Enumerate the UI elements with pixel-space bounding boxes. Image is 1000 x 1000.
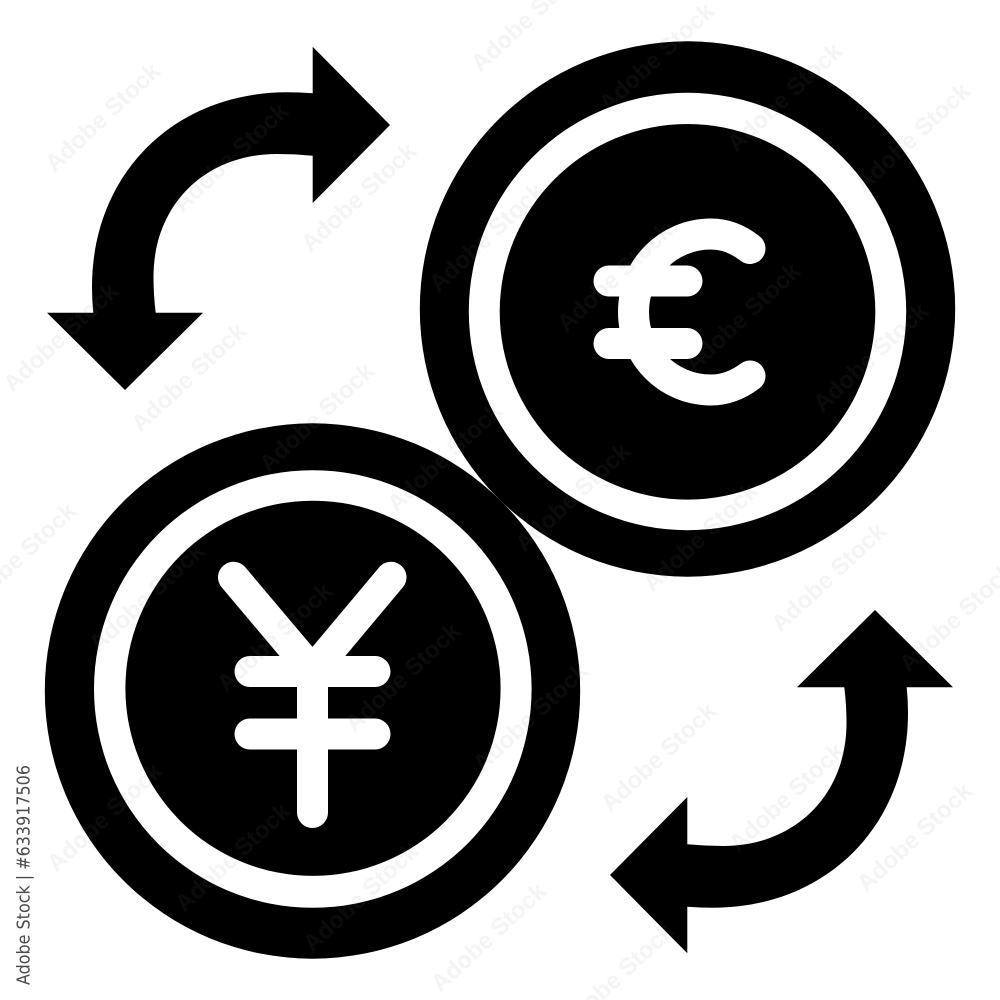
arrow: top-left curved double arrow [47,47,390,390]
faint diagonal watermark pattern: Adobe Stock [254,357,380,477]
faint diagonal watermark pattern: Adobe Stock [850,77,976,197]
faint diagonal watermark pattern: Adobe Stock [724,737,850,857]
faint diagonal watermark pattern: Adobe Stock [170,797,296,917]
faint diagonal watermark pattern: Adobe Stock [424,177,550,297]
faint diagonal watermark pattern: Adobe Stock [722,37,848,157]
faint diagonal watermark pattern: Adobe Stock [594,0,720,117]
euro symbol [609,234,750,390]
coin: yen [45,423,580,959]
faint diagonal watermark pattern: Adobe Stock [42,757,168,877]
coin: euro [420,41,955,577]
faint diagonal watermark pattern: Adobe Stock [296,137,422,257]
arrow: bottom-right curved double arrow [610,610,953,953]
faint diagonal watermark pattern: Adobe Stock [168,97,294,217]
faint diagonal watermark pattern: Adobe Stock [126,317,252,437]
faint diagonal watermark pattern: Adobe Stock [0,277,124,397]
vertical stock image credit: Adobe Stock | #633917506 [14,765,34,985]
faint diagonal watermark pattern: Adobe Stock [340,617,466,737]
yen symbol [234,577,391,812]
faint diagonal watermark pattern: Adobe Stock [40,57,166,177]
faint diagonal watermark pattern: Adobe Stock [510,437,636,557]
faint diagonal watermark pattern: Adobe Stock [298,837,424,957]
faint diagonal watermark pattern: Adobe Stock [468,657,594,777]
faint diagonal watermark pattern: Adobe Stock [382,397,508,517]
faint diagonal watermark pattern: Adobe Stock [84,537,210,657]
faint diagonal watermark pattern: Adobe Stock [852,777,978,897]
faint diagonal watermark pattern: Adobe Stock [426,877,552,997]
faint diagonal watermark pattern: Adobe Stock [808,297,934,417]
faint diagonal watermark pattern: Adobe Stock [552,217,678,337]
faint diagonal watermark pattern: Adobe Stock [638,477,764,597]
faint diagonal watermark pattern: Adobe Stock [766,517,892,637]
faint diagonal watermark pattern: Adobe Stock [596,697,722,817]
faint diagonal watermark pattern: Adobe Stock [680,257,806,377]
faint diagonal watermark pattern: Adobe Stock [212,577,338,697]
